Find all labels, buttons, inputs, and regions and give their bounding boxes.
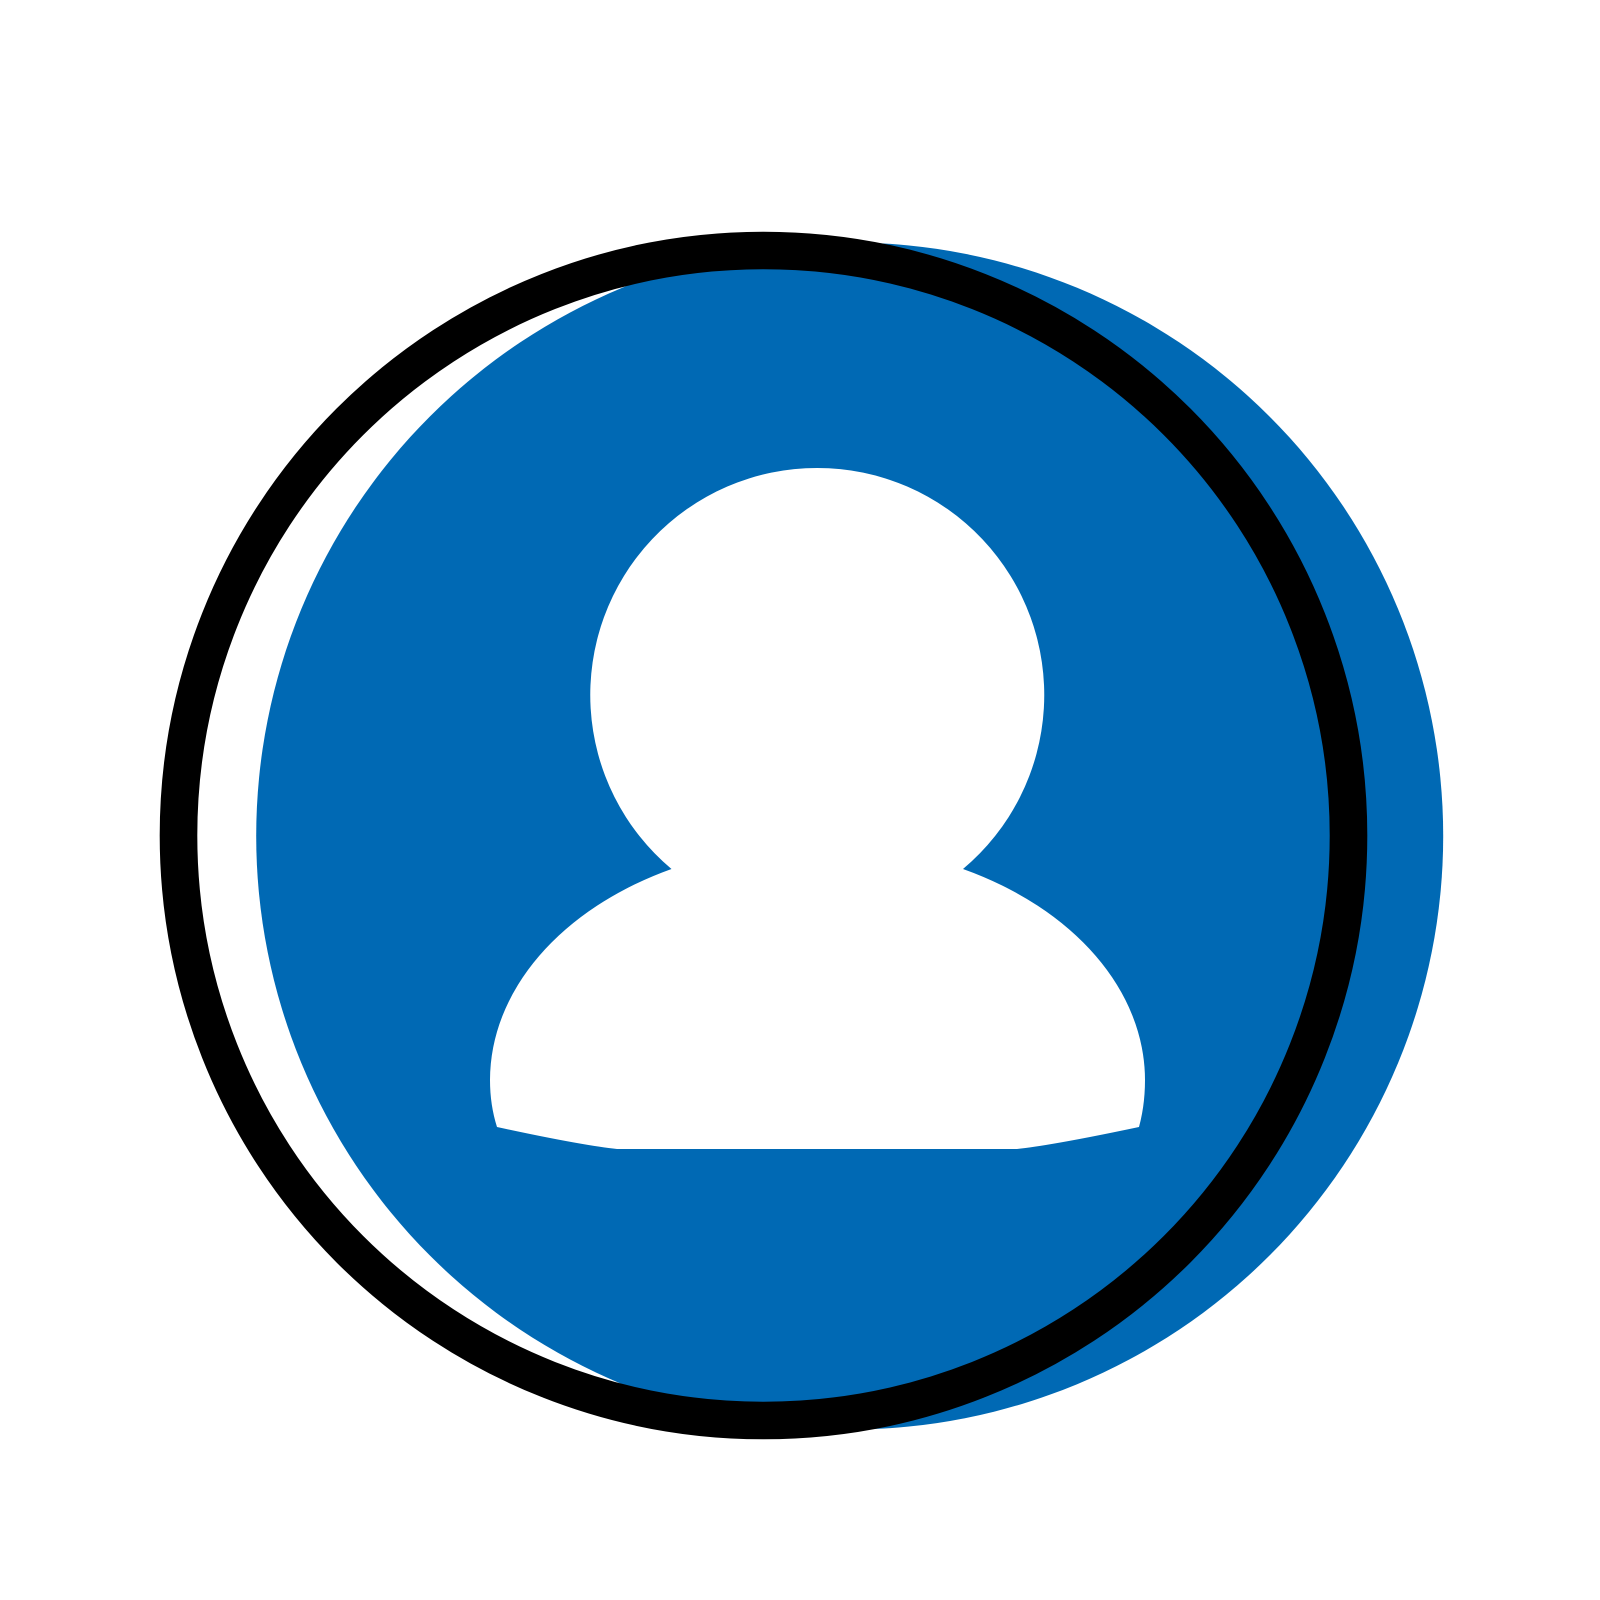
icon: black outline ring <box>178 250 1348 1420</box>
icon: person silhouette <box>490 468 1145 1149</box>
icon: blue offset disc <box>256 242 1443 1430</box>
